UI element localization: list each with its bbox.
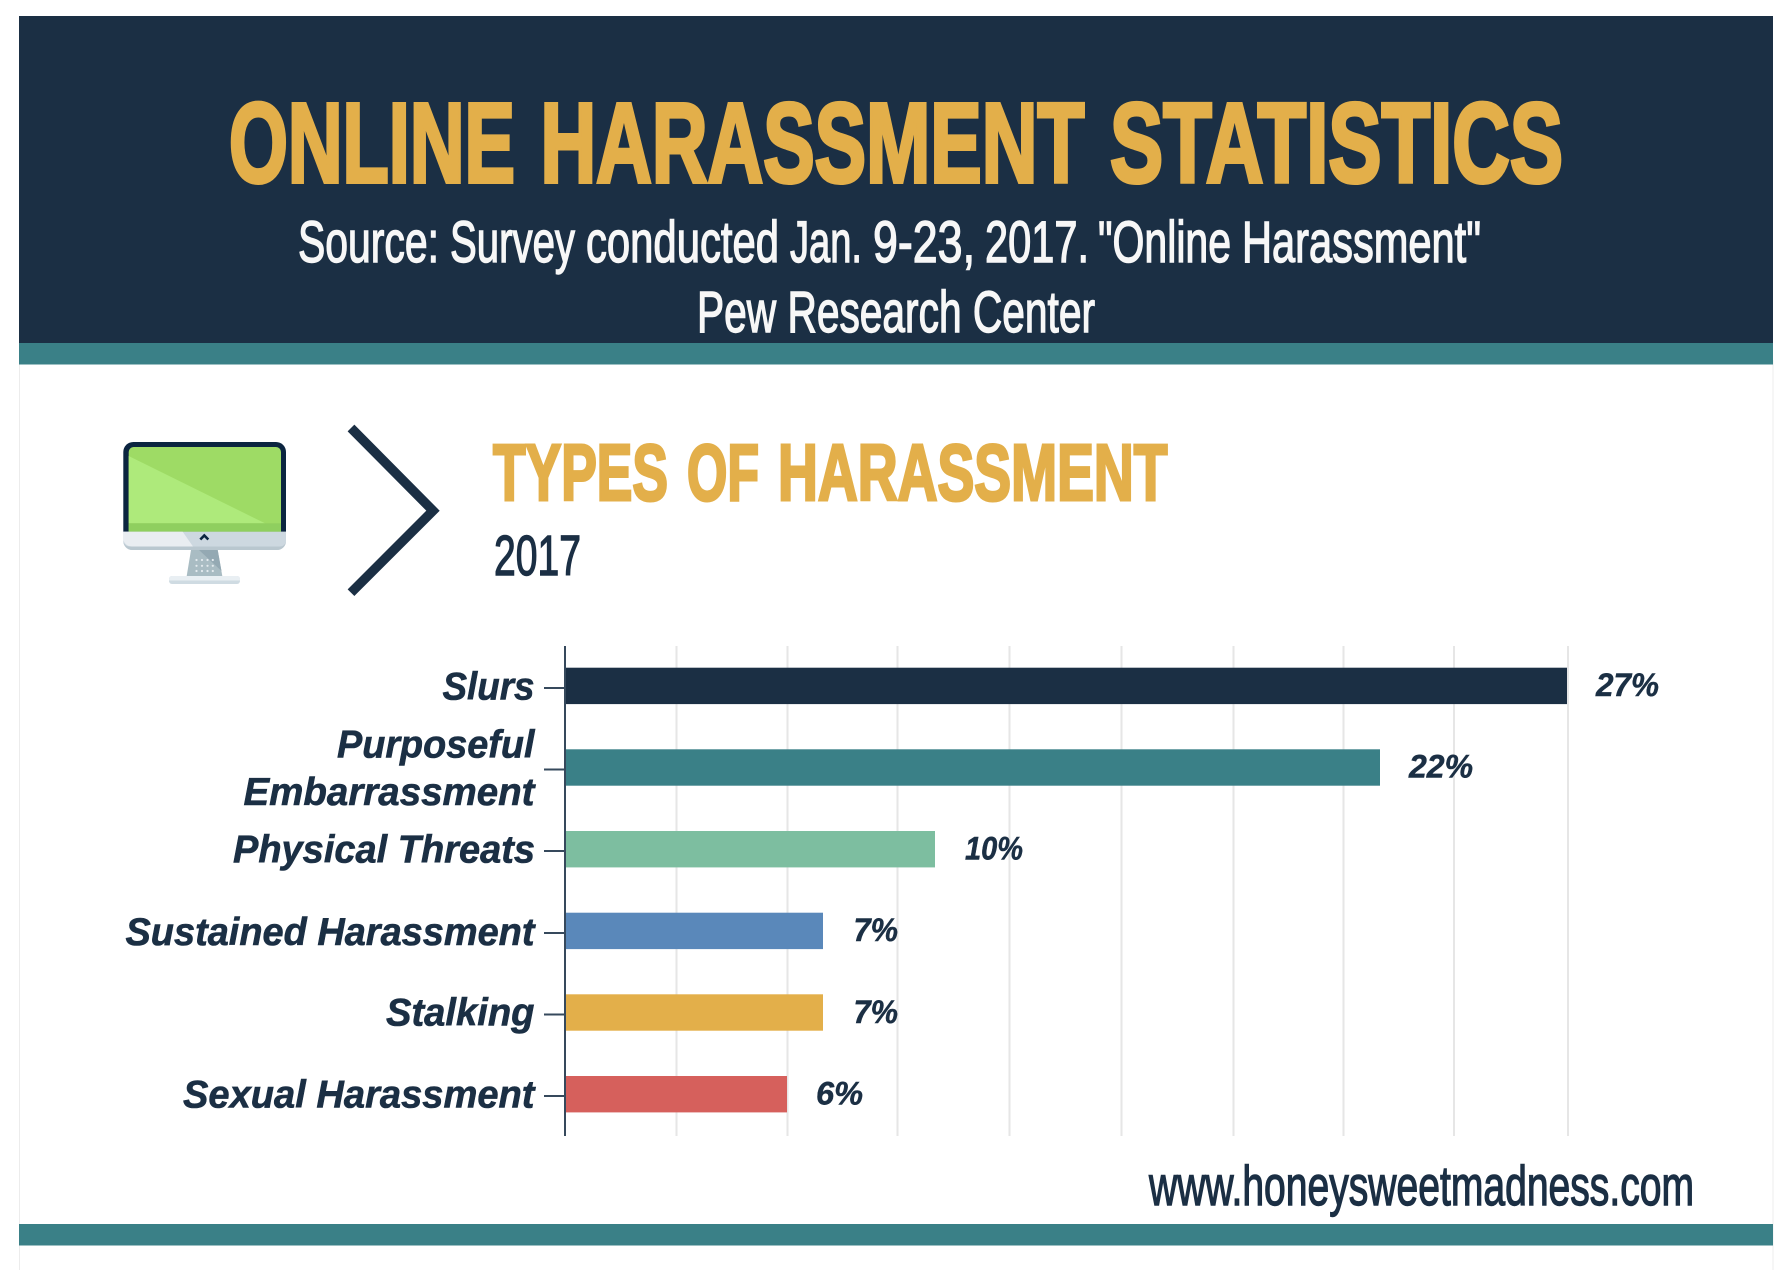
section heading (493, 428, 1168, 517)
bar chart (126, 646, 1659, 1136)
bar: physical threats: 10% (965, 830, 1023, 866)
source line: "Online (1098, 210, 1231, 275)
footer teal band (19, 1224, 1773, 1246)
bar: sexual harassment: 6% (816, 1076, 863, 1112)
bar: slurs: Slurs (442, 665, 534, 708)
bar: stalking: Stalking (386, 992, 535, 1034)
source line: conducted (586, 210, 779, 275)
source line: Harassment" (1242, 210, 1481, 275)
bar: slurs (442, 665, 1659, 708)
bar: purposeful embarrassment: 22% (1408, 749, 1473, 785)
bar: slurs: 27% (1595, 667, 1659, 703)
source line: 2017. (985, 210, 1089, 275)
source line: Jan. (790, 210, 862, 275)
bar: physical threats: Physical Threats (233, 829, 535, 872)
arrow: chevron (351, 428, 433, 593)
bar: sexual harassment (183, 1074, 863, 1117)
header teal band (19, 343, 1773, 364)
header panel (19, 16, 1773, 345)
section heading: HARASSMENT (778, 428, 1168, 517)
bar: sustained harassment: 7% (854, 912, 898, 948)
bar: purposeful embarrassment: Embarrassment (244, 771, 536, 814)
title: HARASSMENT (540, 80, 1084, 206)
bar: purposeful embarrassment: Purposeful (337, 724, 536, 767)
source organisation: Pew Research Center (697, 280, 1095, 345)
section heading: OF (687, 428, 759, 517)
bar: sexual harassment: Sexual Harassment (183, 1074, 536, 1117)
source line: Survey (450, 210, 575, 275)
bar: stalking (386, 992, 898, 1034)
source line: 9-23, (873, 210, 975, 275)
source line (298, 210, 1481, 275)
section year: 2017 (494, 524, 581, 588)
section heading: TYPES (493, 428, 668, 517)
icon: desktop monitor (123, 442, 286, 584)
bar: physical threats (233, 829, 1023, 872)
title: STATISTICS (1110, 80, 1563, 206)
title: ONLINE (229, 80, 515, 206)
title (229, 80, 1563, 206)
bar: sustained harassment (126, 911, 898, 954)
bar: stalking: 7% (854, 994, 898, 1030)
bar: sustained harassment: Sustained Harassment (126, 911, 536, 954)
bar: purposeful embarrassment (244, 724, 1473, 814)
source line: Source: (298, 210, 439, 275)
